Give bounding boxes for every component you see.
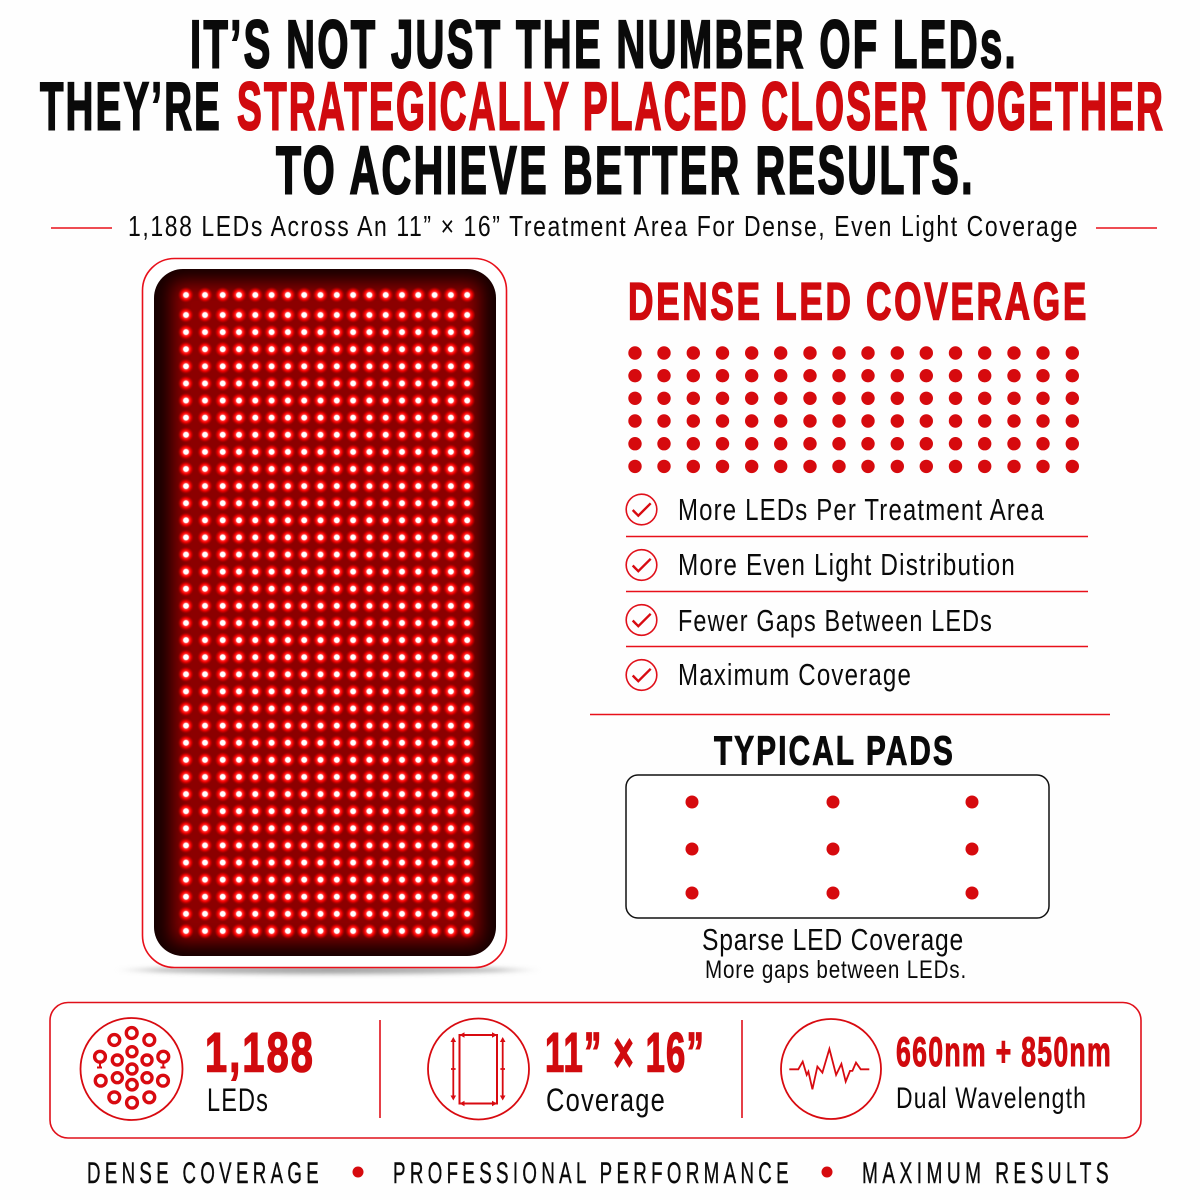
stat: wavelength	[781, 1019, 1112, 1119]
pad red glow	[172, 282, 480, 942]
heading: typical pads: TYPICAL PADS	[714, 728, 955, 774]
checklist	[626, 492, 1088, 692]
LED array	[178, 286, 475, 940]
stat: coverage: Coverage	[546, 1082, 666, 1118]
icon: waveform	[781, 1019, 881, 1119]
item: maximum coverage	[626, 657, 912, 692]
stat: wavelength: Dual Wavelength	[896, 1082, 1087, 1115]
item: even distribution: More Even Light Distribution	[678, 547, 1016, 582]
footer tagline	[87, 1157, 1113, 1190]
item: fewer gaps: Fewer Gaps Between LEDs	[678, 603, 993, 638]
stat: coverage: 11” × 16”	[545, 1020, 705, 1084]
icon: LED cluster	[80, 1018, 182, 1120]
pad shadow	[114, 965, 542, 975]
item: maximum coverage: Maximum Coverage	[678, 657, 912, 692]
typical pads sparse box	[626, 775, 1049, 918]
item: even distribution	[626, 547, 1016, 582]
title	[40, 6, 1165, 208]
stat: coverage	[428, 1018, 705, 1120]
pad dark body	[154, 269, 496, 956]
sparse caption: More gaps between LEDs.	[705, 956, 967, 984]
footer tagline: PROFESSIONAL PERFORMANCE	[393, 1157, 793, 1190]
footer tagline: DENSE COVERAGE	[87, 1157, 323, 1190]
item: more LEDs	[626, 492, 1045, 527]
icon: dimension rectangle	[428, 1018, 529, 1120]
LED pad product	[114, 258, 542, 975]
item: fewer gaps	[626, 603, 993, 638]
sparse caption: Sparse LED Coverage	[702, 922, 964, 957]
pad outer outline	[142, 258, 506, 968]
dense dot grid	[628, 346, 1079, 473]
stat: LEDs	[80, 1018, 315, 1120]
stat: LEDs: LEDs	[207, 1082, 269, 1118]
item: more LEDs: More LEDs Per Treatment Area	[678, 492, 1045, 527]
title: THEY’RE	[40, 68, 222, 144]
sparse caption	[702, 922, 967, 984]
stats panel	[50, 1002, 1141, 1138]
stat: LEDs: 1,188	[205, 1020, 315, 1084]
